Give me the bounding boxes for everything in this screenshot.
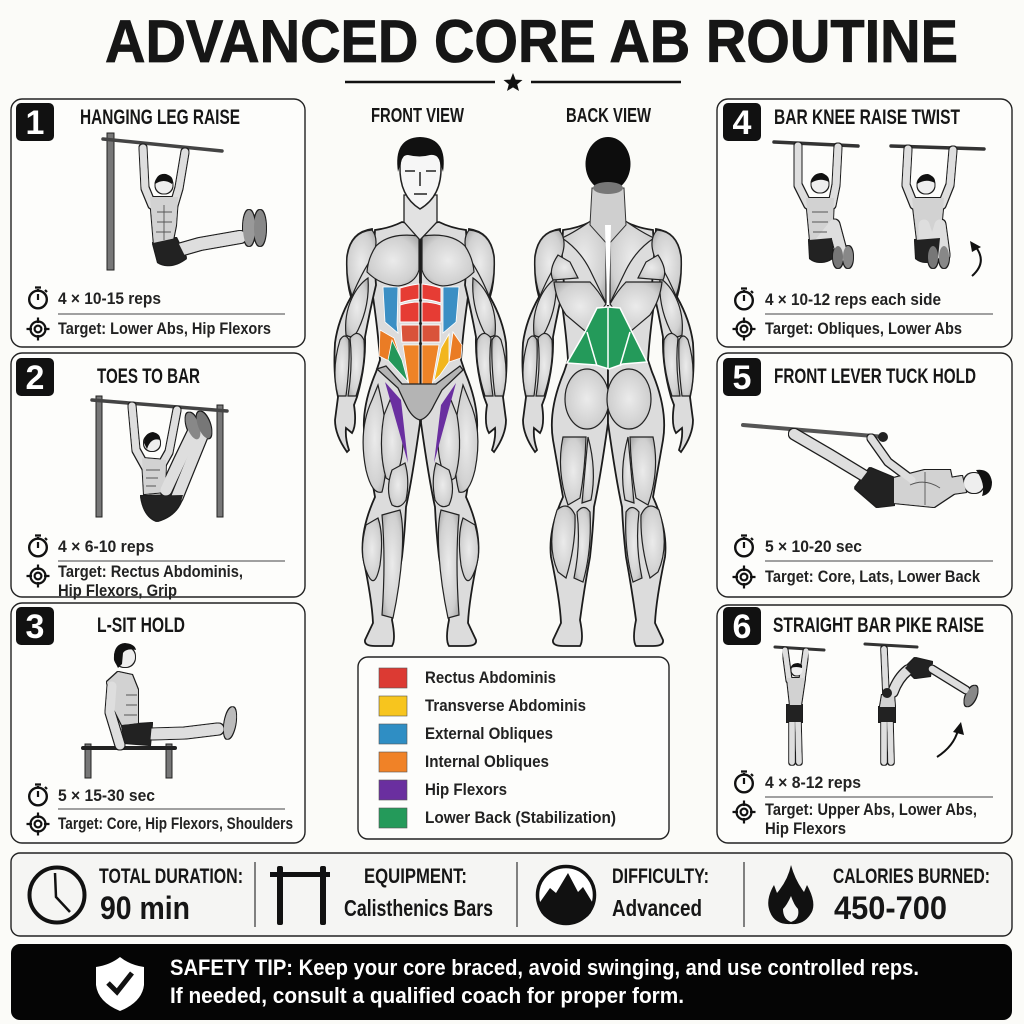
icon: stopwatch (29, 536, 47, 556)
sets and reps: 5 × 10-20 sec (765, 538, 862, 556)
illustration: straight bar pike raise (775, 644, 980, 762)
stat: calories burned (833, 865, 990, 926)
badge 6: 6 (733, 608, 751, 646)
icon: target (26, 812, 50, 836)
anatomy figure: back (522, 137, 694, 646)
target muscles: Target: Core, Hip Flexors, Shoulders (58, 815, 293, 833)
badge 6 (723, 607, 761, 646)
stat: difficulty: Advanced (612, 895, 702, 921)
illustration: l-sit hold (83, 643, 238, 778)
transverse abdominis, obliques and lower abs (379, 287, 462, 385)
icon: stopwatch (29, 288, 47, 308)
target muscles: Target: Rectus Abdominis, (58, 563, 243, 581)
sets and reps: 4 × 10-15 reps (58, 290, 161, 308)
legend: internal obliques (379, 752, 549, 772)
safety text (170, 955, 919, 1008)
badge 4 (723, 103, 761, 142)
icon: flame (768, 865, 813, 924)
sets and reps: 4 × 8-12 reps (765, 774, 861, 792)
rectus abdominis (400, 284, 441, 342)
legend: transverse abdominis (379, 696, 586, 716)
panel: legend (358, 657, 669, 839)
heading: front view: FRONT VIEW (371, 105, 464, 127)
legend: internal obliques: Internal Obliques (425, 753, 549, 771)
anatomy figure: front (334, 137, 507, 646)
icon: stopwatch (735, 288, 753, 309)
target muscles (765, 801, 977, 838)
glutes (565, 369, 651, 429)
safety text: SAFETY TIP: Keep your core braced, avoid swinging, and use controlled reps. (170, 955, 919, 980)
legend: lower back (379, 808, 616, 828)
target muscles: Target: Core, Lats, Lower Back (765, 568, 981, 586)
panel: safety tip (11, 944, 1012, 1020)
stat: total duration: TOTAL DURATION: (99, 865, 243, 888)
icon: shield (96, 957, 144, 1011)
panel: exercise 5 (717, 353, 1012, 597)
stat: equipment: Calisthenics Bars (344, 895, 493, 921)
target muscles (58, 563, 243, 600)
legend: external obliques: External Obliques (425, 725, 553, 743)
illustration: front lever tuck hold (743, 425, 992, 507)
target muscles: Target: Upper Abs, Lower Abs, (765, 801, 977, 819)
title: ADVANCED CORE AB ROUTINE (105, 8, 958, 75)
badge 1 (16, 103, 54, 142)
legend: hip flexors (379, 780, 507, 800)
stat: equipment (344, 865, 493, 921)
panel: exercise 2 (11, 353, 305, 600)
illustration: hanging leg raise (103, 133, 266, 270)
briefs (377, 366, 463, 420)
lower back (567, 307, 647, 369)
sets and reps: 5 × 15-30 sec (58, 787, 155, 805)
target muscles: Target: Obliques, Lower Abs (765, 320, 962, 338)
legend: hip flexors: Hip Flexors (425, 781, 507, 799)
badge 2 (16, 358, 54, 397)
icon: target (26, 318, 50, 340)
hip flexors (385, 382, 456, 463)
target muscles: Target: Lower Abs, Hip Flexors (58, 320, 271, 338)
legend: rectus abdominis: Rectus Abdominis (425, 669, 556, 687)
icon: target (732, 566, 756, 588)
icon: clock (30, 868, 84, 922)
icon: target (26, 564, 50, 588)
target muscles: Hip Flexors (765, 820, 846, 838)
panel: exercise 3 (11, 603, 305, 843)
badge 1: 1 (26, 104, 44, 142)
badge 2: 2 (26, 359, 44, 397)
illustration: toes to bar (92, 396, 227, 521)
badge 3: 3 (26, 608, 44, 646)
head: front (397, 137, 444, 240)
legend: rectus abdominis (379, 668, 556, 688)
panel: summary stats (11, 853, 1012, 936)
head: back (586, 137, 630, 305)
stat: calories burned: 450-700 (834, 890, 947, 926)
sets and reps: 4 × 10-12 reps each side (765, 291, 941, 309)
sets and reps: 4 × 6-10 reps (58, 538, 154, 556)
stat: difficulty: DIFFICULTY: (612, 865, 709, 888)
legend: lower back: Lower Back (Stabilization) (425, 809, 616, 827)
heading: bar knee raise twist: BAR KNEE RAISE TWIST (774, 105, 960, 129)
illustration: bar knee raise twist (774, 142, 984, 276)
heading: toes to bar: TOES TO BAR (97, 364, 200, 388)
stat: equipment: EQUIPMENT: (364, 865, 467, 888)
icon: stopwatch (735, 772, 753, 792)
icon: target (732, 800, 756, 824)
stat: total duration: 90 min (100, 890, 190, 926)
panel: exercise 1 (11, 99, 305, 347)
badge 4: 4 (733, 104, 752, 142)
badge 3 (16, 607, 54, 646)
icon: stopwatch (735, 536, 753, 556)
icon: stopwatch (29, 784, 47, 805)
badge 5: 5 (733, 359, 751, 397)
stat: total duration (99, 865, 243, 926)
legend: transverse abdominis: Transverse Abdominis (425, 697, 586, 715)
target muscles: Hip Flexors, Grip (58, 582, 177, 600)
arrow: twist (970, 241, 981, 276)
stat: difficulty (612, 865, 709, 921)
heading: l-sit hold: L-SIT HOLD (97, 613, 185, 637)
panel: exercise 6 (717, 605, 1012, 843)
icon: target (732, 318, 756, 340)
panel: exercise 4 (717, 99, 1012, 347)
badge 5 (723, 358, 761, 397)
legend: external obliques (379, 724, 553, 744)
arrow: raise (937, 722, 964, 757)
heading: hanging leg raise: HANGING LEG RAISE (80, 105, 240, 129)
heading: back view: BACK VIEW (566, 105, 651, 127)
icon: mountain (538, 866, 594, 924)
icon: bars (270, 866, 330, 925)
safety text: If needed, consult a qualified coach for proper form. (170, 983, 684, 1008)
